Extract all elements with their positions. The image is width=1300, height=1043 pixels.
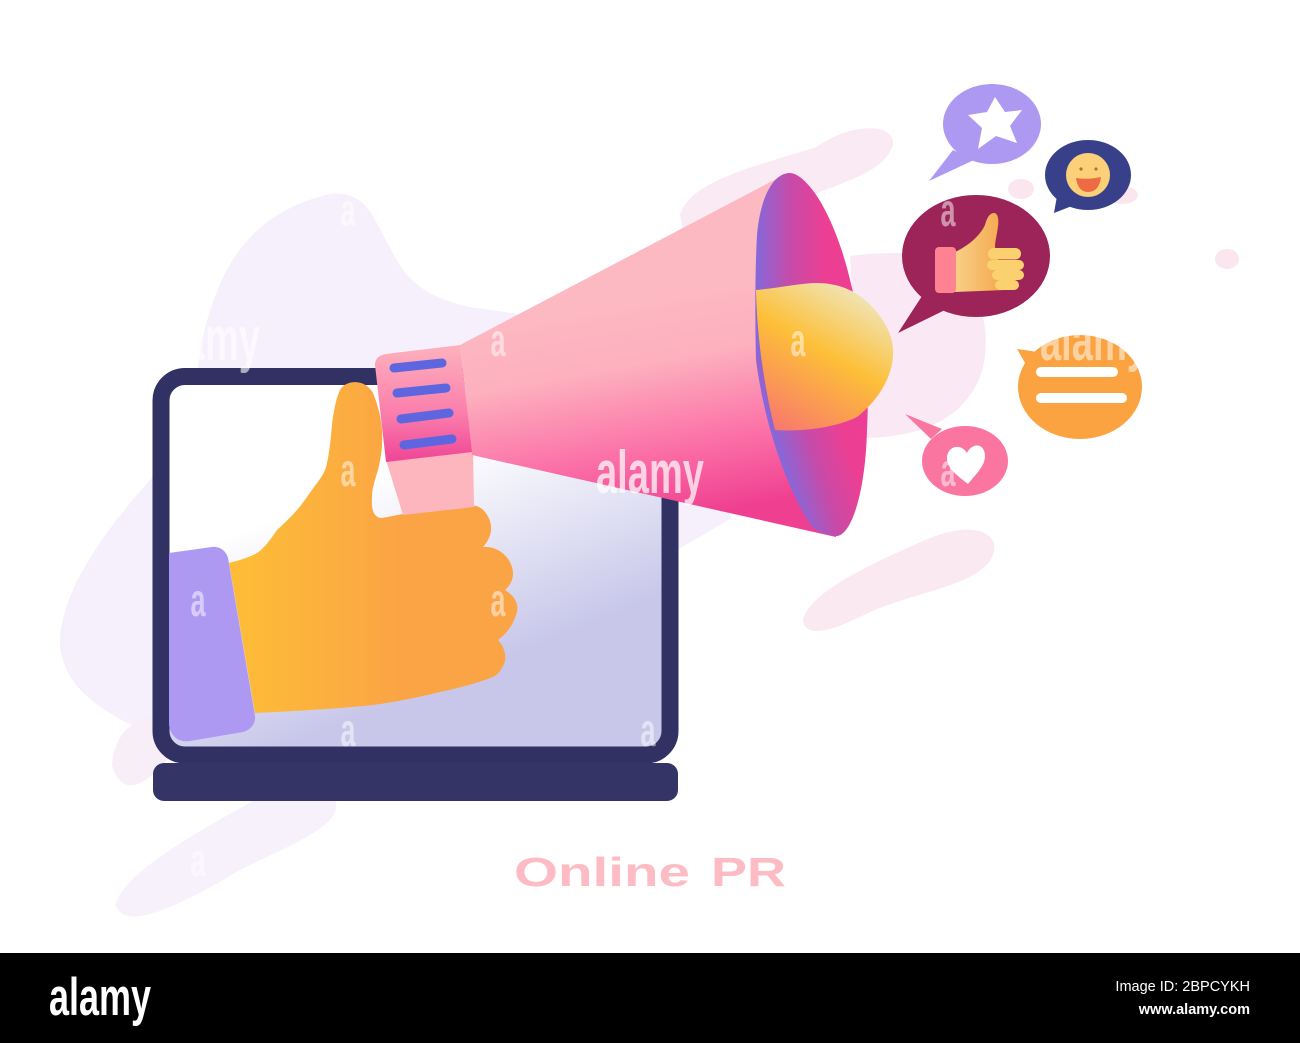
watermark text: a <box>940 444 956 496</box>
icon: smiley face <box>1066 153 1110 197</box>
handle <box>386 450 474 515</box>
watermark text: a <box>640 704 656 756</box>
watermark text: a <box>340 704 356 756</box>
collar stripes <box>394 363 452 445</box>
title: Online PR <box>514 849 786 895</box>
sleeve <box>169 547 255 741</box>
bubble: text lines <box>1017 335 1142 439</box>
bubble: star <box>929 84 1041 181</box>
watermark text: a <box>340 184 356 236</box>
laptop base <box>153 763 678 801</box>
footer image id: Image ID: 2BPCYKH <box>1115 979 1250 995</box>
cone <box>460 178 836 537</box>
icon: star <box>968 97 1022 149</box>
text lines <box>1036 367 1118 377</box>
bell opening upper <box>755 173 870 360</box>
footer site url: www.alamy.com <box>1138 1002 1250 1018</box>
title: Online PR: PR <box>711 849 786 895</box>
watermark text <box>152 184 1148 886</box>
footer logo: alamy: alamy <box>49 968 151 1027</box>
icon: heart <box>947 445 985 484</box>
watermark text: a <box>490 314 506 366</box>
watermark text: alamy <box>596 439 704 506</box>
laptop <box>153 376 678 801</box>
inner dome <box>756 283 893 430</box>
watermark text: alamy <box>152 305 260 374</box>
thumbs up hand <box>169 382 517 741</box>
watermark text: a <box>790 314 806 366</box>
bubble: heart <box>905 414 1008 496</box>
watermark text: a <box>190 574 206 626</box>
watermark text: a <box>190 834 206 886</box>
watermark text: a <box>940 184 956 236</box>
watermark text: a <box>340 444 356 496</box>
background blobs <box>60 128 1239 916</box>
megaphone <box>375 173 893 537</box>
footer bar <box>0 953 1300 1043</box>
watermark text: a <box>490 574 506 626</box>
title: Online PR: Online <box>514 849 690 895</box>
bell opening lower <box>756 360 868 536</box>
bubble: thumbs up <box>898 195 1050 333</box>
collar band <box>375 345 472 462</box>
laptop screen <box>161 376 670 755</box>
bubble: smiley <box>1045 140 1131 213</box>
icon: small thumb <box>935 213 1024 293</box>
watermark text: alamy <box>1040 308 1148 373</box>
